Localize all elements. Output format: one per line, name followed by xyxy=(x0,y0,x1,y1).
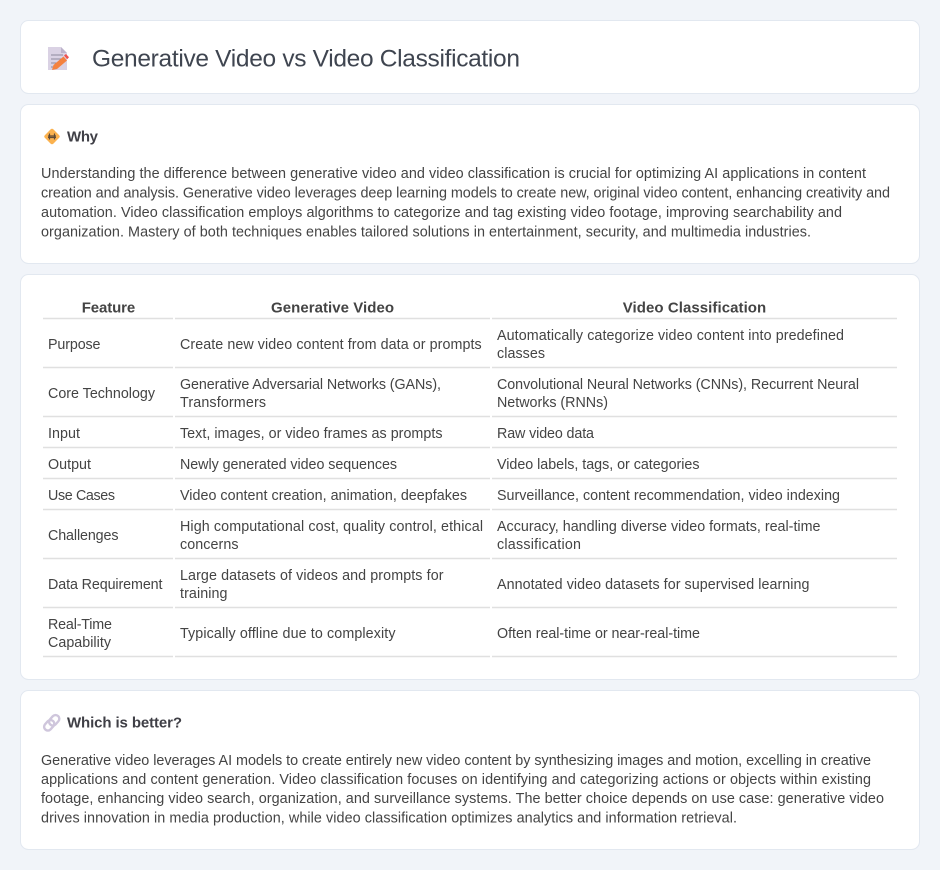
row: challenges: Challenges xyxy=(48,528,118,544)
row: purpose: Automatically categorize video content into predefined xyxy=(497,328,844,344)
icon: warning diamond xyxy=(44,128,60,145)
row: output: Newly generated video sequences xyxy=(180,457,397,473)
row: core technology xyxy=(48,377,859,411)
row: use cases: Video content creation, animation, deepfakes xyxy=(180,488,467,504)
row: output: Video labels, tags, or categories xyxy=(497,457,700,473)
row: purpose: Purpose xyxy=(48,337,101,353)
row: real-time capability: Typically offline due to complexity xyxy=(180,626,396,642)
text block: which is better: footage, enhancing video search, organization, and surveillance systems. The better choice depends on use case: generative video xyxy=(41,791,884,807)
icon: link xyxy=(43,713,61,732)
row: core technology: Convolutional Neural Networks (CNNs), Recurrent Neural xyxy=(497,377,859,393)
row: challenges: concerns xyxy=(180,537,238,553)
row: input: Input xyxy=(48,426,80,442)
table header xyxy=(82,300,766,316)
row: use cases xyxy=(48,488,840,504)
row: purpose: Create new video content from data or prompts xyxy=(180,337,482,353)
row: core technology: Transformers xyxy=(180,395,266,411)
panel: header xyxy=(20,20,920,94)
panel: which is better xyxy=(20,690,920,850)
heading: why: Why xyxy=(67,128,99,146)
text block: which is better: Generative video leverages AI models to create entirely new video content by synthesizing images and motion, excelling in creative xyxy=(41,753,871,769)
row: output xyxy=(48,457,700,473)
row: use cases: Surveillance, content recommendation, video indexing xyxy=(497,488,840,504)
row: input: Raw video data xyxy=(497,426,594,442)
row: challenges: classification xyxy=(497,537,581,553)
table header: Video Classification xyxy=(623,300,766,316)
text block: why: automation. Video classification employs algorithms to categorize and tag existing video footage, improving searchability and xyxy=(41,205,842,221)
table header: Feature xyxy=(82,300,135,316)
table header: Generative Video xyxy=(271,300,394,316)
row: output: Output xyxy=(48,457,91,473)
row: core technology: Core Technology xyxy=(48,386,156,402)
row: data requirement: Data Requirement xyxy=(48,577,163,593)
row: input xyxy=(48,426,594,442)
text block: why: organization. Mastery of both techniques enables tailored solutions in entertainment, security, and multimedia industries. xyxy=(41,224,811,240)
row: data requirement: Large datasets of videos and prompts for xyxy=(180,568,444,584)
row: purpose: classes xyxy=(497,346,545,362)
row: core technology: Networks (RNNs) xyxy=(497,395,608,411)
row: real-time capability: Capability xyxy=(48,635,112,651)
panel: why xyxy=(20,104,920,264)
row: real-time capability: Often real-time or near-real-time xyxy=(497,626,700,642)
row: challenges: Accuracy, handling diverse video formats, real-time xyxy=(497,519,821,535)
row: real-time capability: Real-Time xyxy=(48,617,112,633)
text block: why: Understanding the difference between generative video and video classification is crucial for optimizing AI applications in content xyxy=(41,166,866,182)
row: purpose xyxy=(48,328,844,362)
icon: memo with pencil xyxy=(48,47,69,70)
row: real-time capability xyxy=(48,617,700,651)
row: data requirement: training xyxy=(180,586,228,602)
text block: which is better: drives innovation in media production, while video classification optimizes analytics and information retrieval. xyxy=(41,810,737,826)
text block: which is better xyxy=(41,753,884,826)
row: use cases: Use Cases xyxy=(48,488,115,504)
text block: why: creation and analysis. Generative video leverages deep learning models to create new, original video content, enhancing creativity and xyxy=(41,186,890,202)
text block: why xyxy=(41,166,890,240)
row: data requirement xyxy=(48,568,810,602)
row: input: Text, images, or video frames as prompts xyxy=(180,426,442,442)
heading: which is better: Which is better? xyxy=(67,714,182,732)
row: core technology: Generative Adversarial Networks (GANs), xyxy=(180,377,441,393)
row: challenges: High computational cost, quality control, ethical xyxy=(180,519,483,535)
row: challenges xyxy=(48,519,821,553)
title: Generative Video vs Video Classification xyxy=(92,46,520,72)
text block: which is better: applications and content generation. Video classification focuses on identifying and categorizing actions or objects within existing xyxy=(41,772,871,788)
row: data requirement: Annotated video datasets for supervised learning xyxy=(497,577,810,593)
panel: comparison table xyxy=(20,274,920,680)
